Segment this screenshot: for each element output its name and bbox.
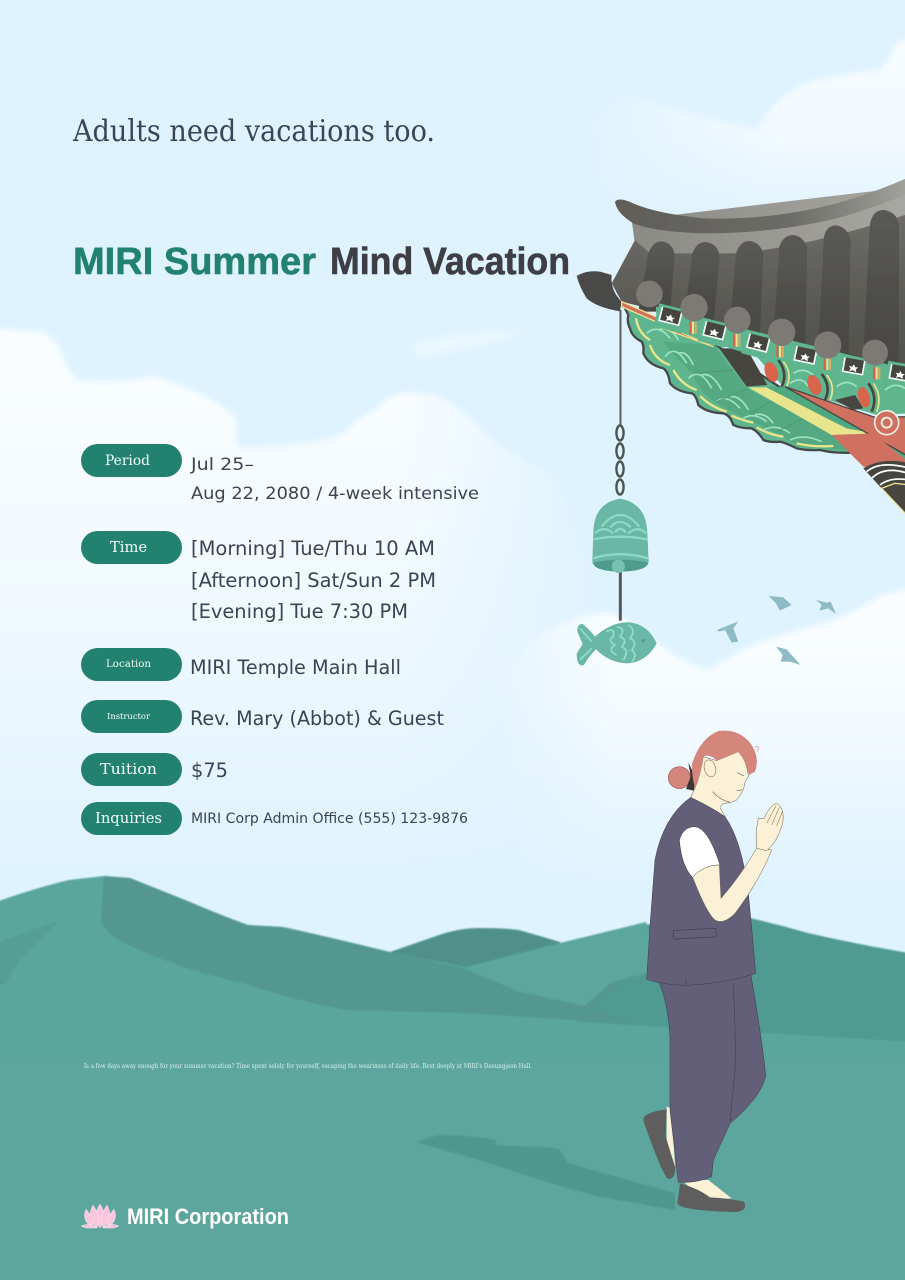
far left shade [0, 920, 60, 985]
icon: lotus logo [81, 1204, 119, 1228]
bell [592, 499, 649, 572]
cloud pattern post [863, 461, 905, 518]
roof underside band [632, 187, 905, 260]
footer: organisation name: MIRI Corporation [127, 1204, 289, 1229]
row: period: Period [105, 453, 150, 469]
back foot [667, 1107, 675, 1167]
face details [713, 773, 744, 802]
wave pattern [647, 329, 822, 442]
description text: Is a few days away enough for your summer vacation? Time spent solely for yourself, escaping the weariness of daily life. Rest deeply at MIRI's Daeungjeon Hall. [84, 1063, 532, 1070]
eave tile caps [636, 281, 888, 366]
yellow edges [636, 318, 833, 446]
trousers [658, 970, 766, 1182]
info list [81, 444, 479, 835]
red lower post [832, 433, 905, 473]
mid base [470, 975, 670, 1025]
row: time: [Evening] Tue 7:30 PM [191, 600, 408, 623]
row: tuition [81, 753, 228, 786]
ear [702, 758, 718, 778]
row: period: Jul 25– [190, 455, 254, 475]
red top beam [622, 302, 713, 347]
far arm [720, 847, 770, 917]
rafter separators [693, 370, 803, 432]
green diagonal beam [767, 387, 905, 463]
bracket panels [654, 303, 905, 389]
clapper rod [616, 570, 625, 621]
red beam [785, 387, 905, 457]
pocket [673, 928, 716, 939]
medallions [762, 360, 905, 412]
lower body [643, 970, 766, 1212]
row: location [81, 648, 401, 681]
roof tiles [638, 210, 899, 367]
illustration: praying figure [643, 731, 783, 1212]
sleeve [679, 827, 720, 877]
yellow diagonal beam [748, 387, 873, 435]
row: location: Location [106, 659, 152, 670]
scalloped green rafters [623, 305, 850, 453]
row: time: Time [110, 538, 147, 556]
ridge [615, 177, 905, 233]
dancheong strip [656, 307, 905, 415]
neck and face [691, 752, 748, 818]
illustration: bell, fish and birds [577, 499, 836, 665]
hands [756, 803, 783, 851]
hair [692, 731, 757, 788]
illustration: temple roof eave [577, 177, 905, 518]
upper body [647, 731, 783, 985]
hair bun [668, 767, 690, 789]
dark gap [835, 395, 863, 410]
roof body [612, 213, 905, 373]
mountains and ground [0, 876, 905, 1280]
row: tuition: $75 [191, 759, 228, 782]
right hill dark side [575, 918, 905, 1042]
row: time: [Morning] Tue/Thu 10 AM [191, 537, 435, 560]
clouds [0, 38, 905, 808]
row: tuition: Tuition [100, 760, 157, 778]
main hill shaded side [101, 876, 640, 1024]
title: MIRI Summer: MIRI Summer [73, 241, 316, 283]
colored stripes [690, 322, 879, 379]
row: inquiries: MIRI Corp Admin Office (555) 123-9876 [191, 811, 468, 827]
middle light hill [462, 922, 660, 1006]
scroll ornament [875, 411, 899, 435]
title: Mind Vacation: Mind Vacation [330, 241, 570, 283]
row: inquiries: Inquiries [95, 809, 162, 827]
birds [717, 596, 836, 665]
row: time: [Afternoon] Sat/Sun 2 PM [191, 569, 436, 592]
front foot [682, 1180, 732, 1200]
heading: tagline: Adults need vacations too. [72, 114, 435, 149]
row: period [81, 444, 479, 504]
row: time [81, 531, 436, 623]
illustration: wind chain [616, 310, 624, 494]
row: instructor: Rev. Mary (Abbot) & Guest [190, 707, 444, 730]
dark panel [719, 348, 767, 387]
row: period: Aug 22, 2080 / 4-week intensive [191, 484, 479, 504]
vest [647, 797, 756, 985]
main hill [0, 876, 905, 1060]
scrunchie [686, 763, 695, 791]
near arm [693, 848, 772, 921]
fish [577, 622, 657, 665]
inner rafter panel [663, 342, 847, 450]
row: inquiries [81, 802, 468, 835]
ground shadow [415, 1135, 675, 1210]
title [73, 241, 570, 283]
row: instructor [81, 700, 444, 733]
back peak [390, 928, 600, 1000]
row: instructor: Instructor [107, 712, 151, 722]
corner tile [577, 271, 622, 311]
row: location: MIRI Temple Main Hall [190, 656, 401, 679]
